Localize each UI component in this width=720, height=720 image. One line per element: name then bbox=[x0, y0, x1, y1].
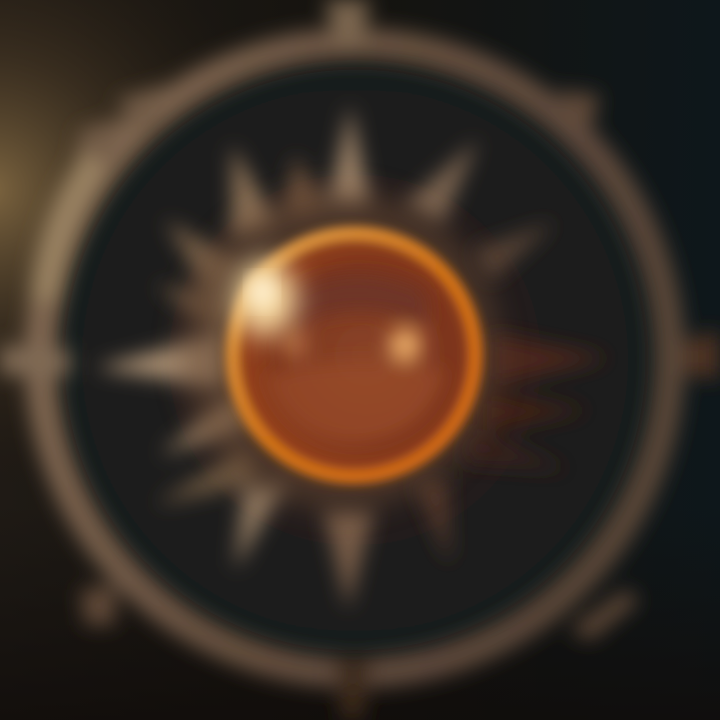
highlight bbox=[233, 260, 297, 336]
inner dark field bbox=[55, 60, 655, 660]
ray bottom bbox=[323, 510, 374, 610]
ray top bbox=[328, 105, 370, 205]
ray upper right bbox=[403, 140, 478, 225]
ring knobs bbox=[325, 0, 370, 45]
ray right upper bbox=[473, 222, 555, 282]
ray right bbox=[490, 333, 610, 387]
ray upper left bbox=[232, 145, 278, 240]
ray lower right bbox=[413, 480, 450, 565]
ray lower left bbox=[235, 480, 288, 570]
face shading bbox=[265, 274, 445, 445]
ray left upper bbox=[165, 220, 240, 302]
sun rays bbox=[95, 105, 610, 610]
ray top mid bbox=[282, 155, 328, 220]
ray left bbox=[95, 332, 225, 388]
sun halo bbox=[180, 190, 500, 510]
sun disc bbox=[232, 233, 476, 477]
ray left lower bbox=[160, 392, 248, 455]
